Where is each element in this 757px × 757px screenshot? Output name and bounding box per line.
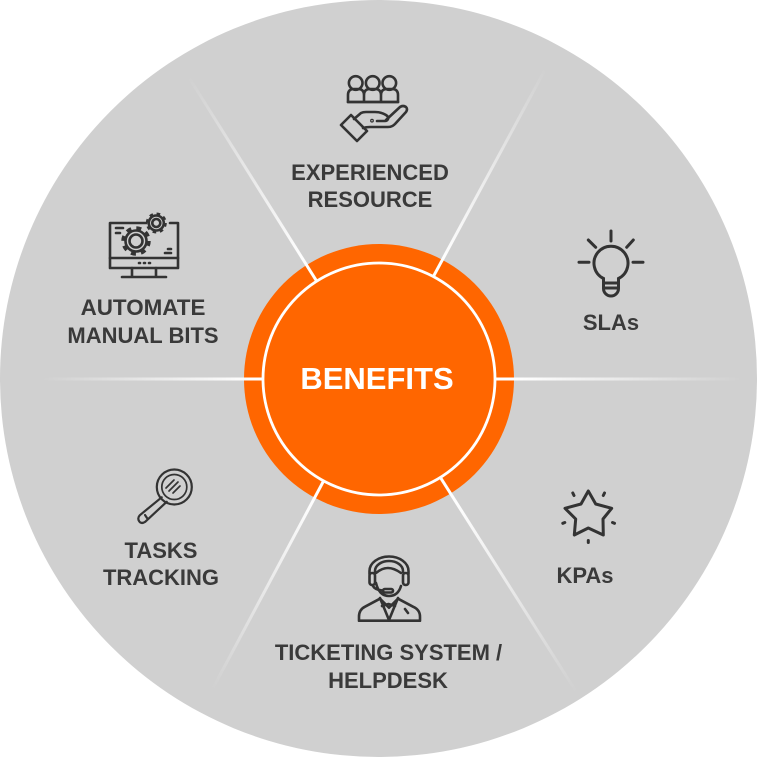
segment: tasks tracking <box>103 470 219 590</box>
segment: automate manual bits: MANUAL BITS <box>67 323 219 348</box>
label: SLAs <box>583 310 639 335</box>
segment: automate manual bits <box>67 214 219 348</box>
segment: tasks tracking: TRACKING <box>103 565 219 590</box>
icon: star <box>563 491 614 542</box>
label: EXPERIENCED <box>291 160 449 185</box>
segment: SLAs <box>579 231 643 335</box>
segment dividers <box>42 68 742 693</box>
icon: support agent <box>359 556 420 621</box>
segment: KPAs <box>556 491 614 588</box>
label: TICKETING SYSTEM / <box>275 640 502 665</box>
icon: light bulb <box>579 231 643 296</box>
icon: monitor with gears <box>110 214 178 277</box>
segment: experienced resource <box>291 76 449 212</box>
icon: magnifying glass <box>138 470 192 523</box>
segment: experienced resource: RESOURCE <box>308 187 432 212</box>
label: AUTOMATE <box>81 295 205 320</box>
segment: ticketing system / helpdesk: HELPDESK <box>328 668 448 693</box>
orange hub ring <box>244 244 514 514</box>
hub title: BENEFITS <box>300 361 454 396</box>
label: KPAs <box>556 563 614 588</box>
segment: ticketing system / helpdesk <box>275 556 502 693</box>
centre hub <box>263 263 495 495</box>
label: TASKS <box>125 538 197 563</box>
icon: hand holding people <box>341 76 407 141</box>
